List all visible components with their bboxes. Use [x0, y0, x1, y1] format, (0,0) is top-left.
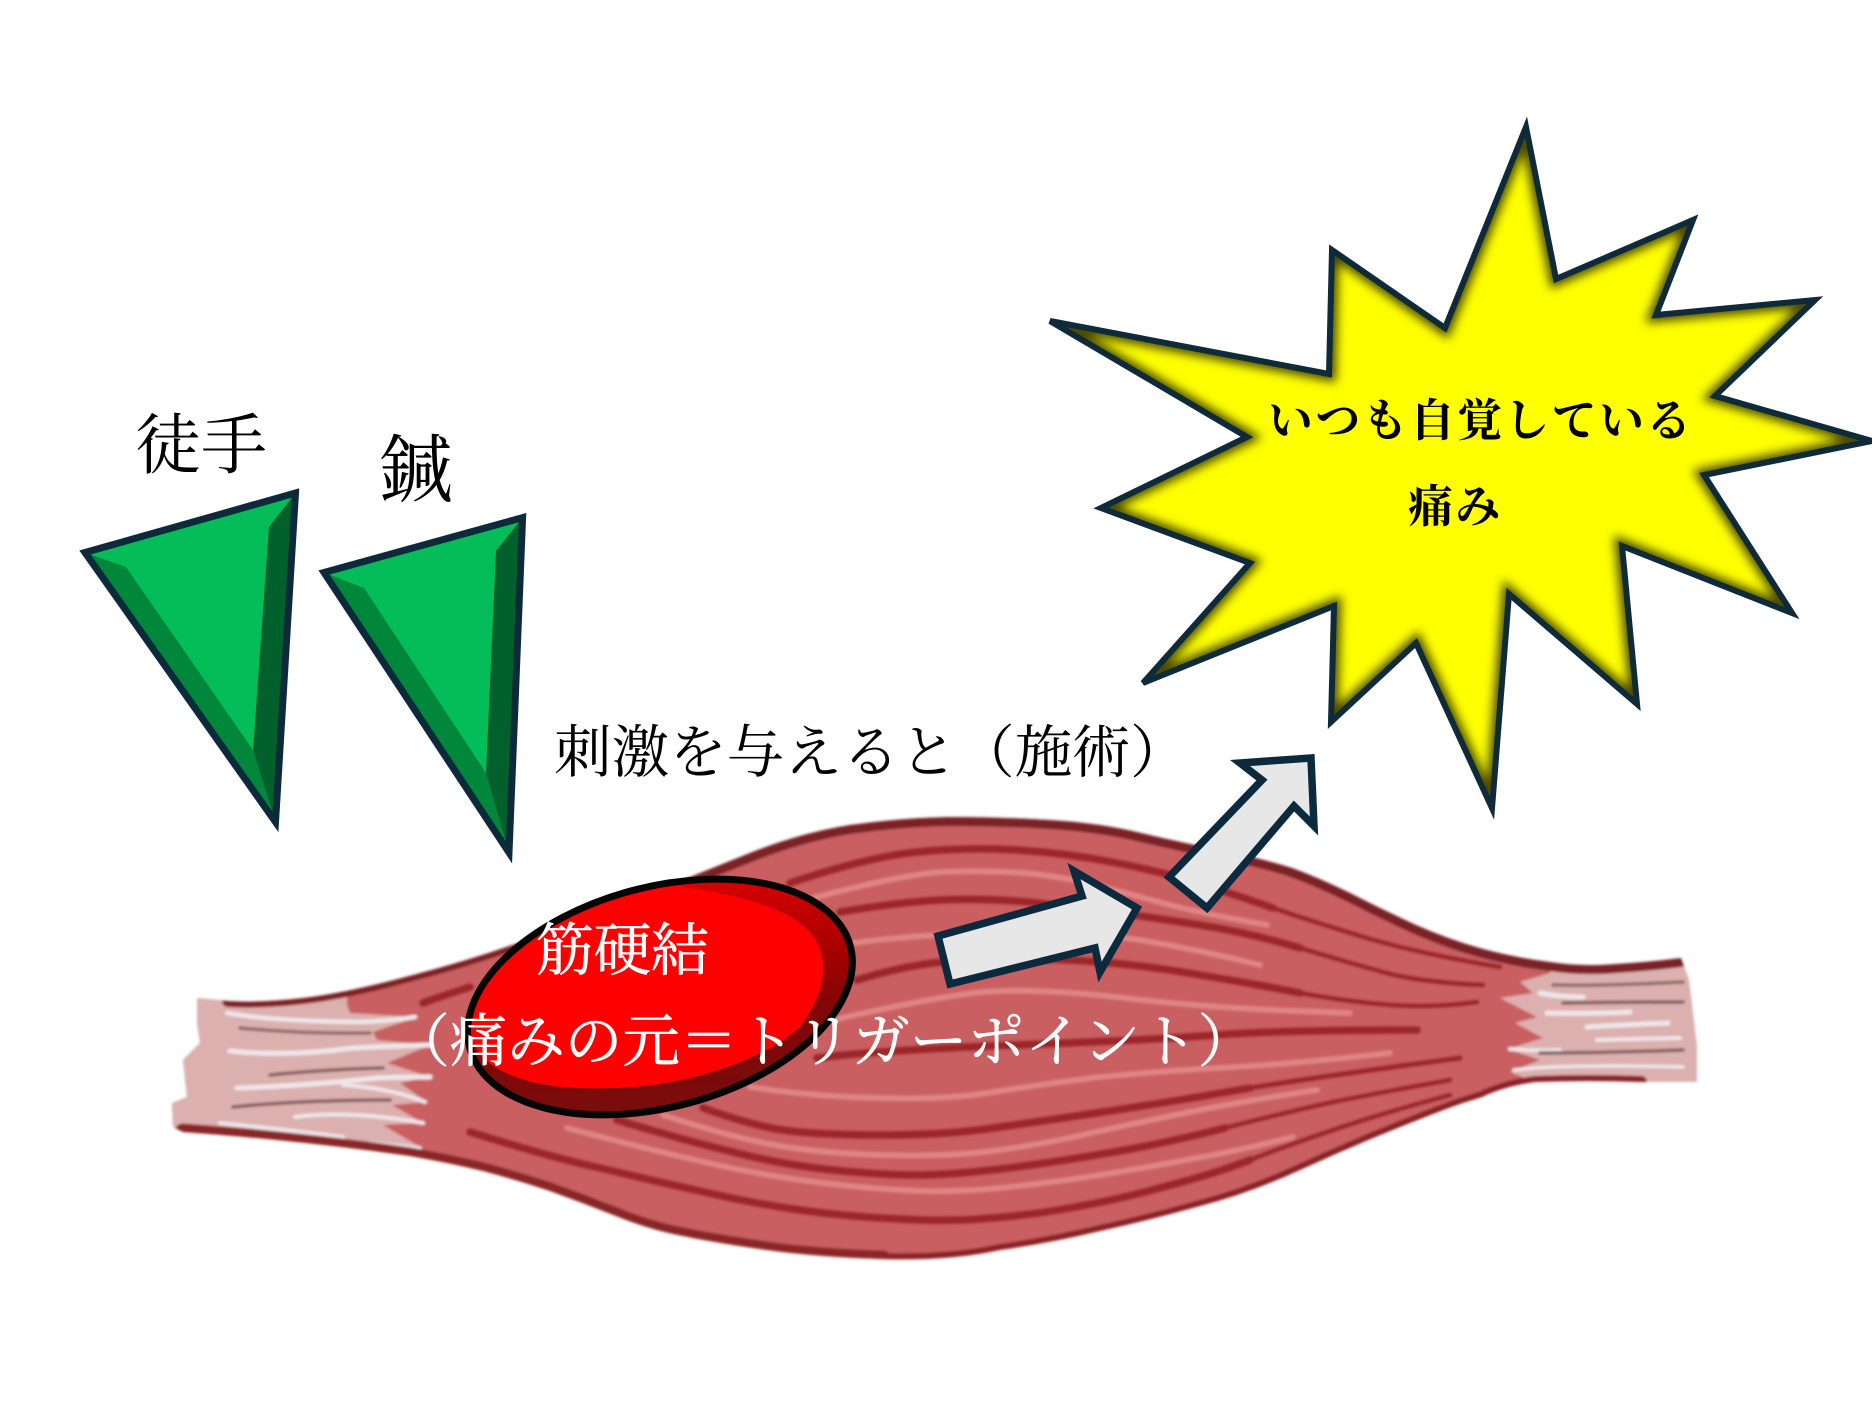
- label: acupuncture: 鍼: [379, 431, 453, 513]
- right tendon: [1500, 964, 1698, 1084]
- arrow: along muscle: [938, 871, 1137, 984]
- label: muscle knot: 筋硬結: [536, 920, 709, 983]
- starburst text: pain: 痛み: [1408, 482, 1503, 532]
- label: stimulation: 刺激を与えると（施術）: [554, 722, 1188, 785]
- arrow: toward pain: [1169, 758, 1314, 908]
- label: manual therapy: 徒手: [135, 410, 267, 483]
- starburst text: always felt: いつも自覚している: [1268, 396, 1694, 446]
- muscle illustration: [160, 817, 1710, 1259]
- pale muscle fibres: [567, 871, 1390, 1191]
- dark muscle fibres: [423, 849, 1500, 1220]
- label: trigger point: （痛みの元＝トリガーポイント）: [392, 1011, 1255, 1074]
- knot: trigger point ellipse: [464, 876, 856, 1118]
- left tendon: [170, 995, 434, 1152]
- starburst: constant pain: [1050, 127, 1872, 808]
- needle triangle: acupuncture: [324, 518, 523, 852]
- needle triangle: manual therapy: [85, 493, 296, 822]
- muscle outline: [183, 817, 1681, 1259]
